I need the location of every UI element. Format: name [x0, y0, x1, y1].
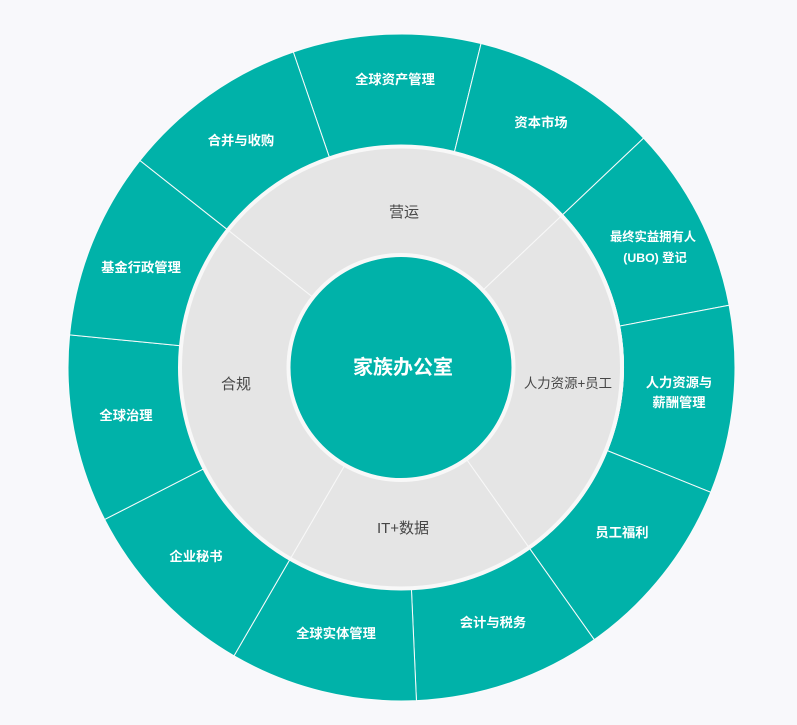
segment: 人力资源与薪酬管理 — [607, 305, 735, 492]
segment: 会计与税务: 会计与税务 — [460, 614, 526, 630]
segment: 全球治理 — [67, 335, 204, 520]
segment: 全球治理: 全球治理 — [99, 407, 153, 423]
segment: 员工福利: 员工福利 — [595, 525, 649, 540]
segment: 营运 — [227, 145, 563, 298]
segment: 合规 — [179, 230, 346, 560]
segment: 会计与税务 — [411, 548, 595, 701]
segment: 人力资源与薪酬管理: 人力资源与 — [646, 375, 712, 390]
segment: 合规: 合规 — [221, 376, 251, 393]
segment: 合并与收购 — [140, 51, 330, 230]
segment: IT+数据: IT+数据 — [377, 520, 429, 537]
segment: 最终实益拥有人 (UBO) 登记: 最终实益拥有人 — [610, 229, 697, 244]
center circle: 家族办公室: 家族办公室 — [353, 355, 453, 379]
segment: 人力资源+员工 — [466, 214, 624, 549]
segment: 全球实体管理: 全球实体管理 — [296, 625, 376, 641]
segment: 员工福利 — [529, 450, 711, 640]
panel: outer ring of services — [67, 34, 735, 701]
segment: 全球资产管理: 全球资产管理 — [355, 71, 435, 87]
panel: inner ring of categories — [179, 145, 624, 590]
segment: 人力资源与薪酬管理: 薪酬管理 — [652, 394, 706, 410]
segment: 营运: 营运 — [389, 204, 419, 221]
segment: 基金行政管理 — [70, 160, 228, 346]
segment: 人力资源+员工: 人力资源+员工 — [524, 376, 612, 391]
center circle: 家族办公室 — [288, 255, 514, 480]
segment: 基金行政管理: 基金行政管理 — [101, 259, 181, 275]
segment: IT+数据 — [290, 459, 530, 590]
segment: 资本市场 — [454, 43, 644, 215]
segment: 企业秘书 — [104, 468, 290, 656]
segment: 最终实益拥有人 (UBO) 登记: (UBO) 登记 — [623, 251, 687, 265]
segment: 资本市场: 资本市场 — [514, 114, 568, 130]
segment: 全球资产管理 — [293, 34, 481, 158]
segment: 企业秘书: 企业秘书 — [169, 548, 223, 564]
segment: 最终实益拥有人 (UBO) 登记 — [562, 138, 730, 326]
segment: 合并与收购: 合并与收购 — [208, 132, 274, 148]
segment: 全球实体管理 — [234, 559, 417, 701]
